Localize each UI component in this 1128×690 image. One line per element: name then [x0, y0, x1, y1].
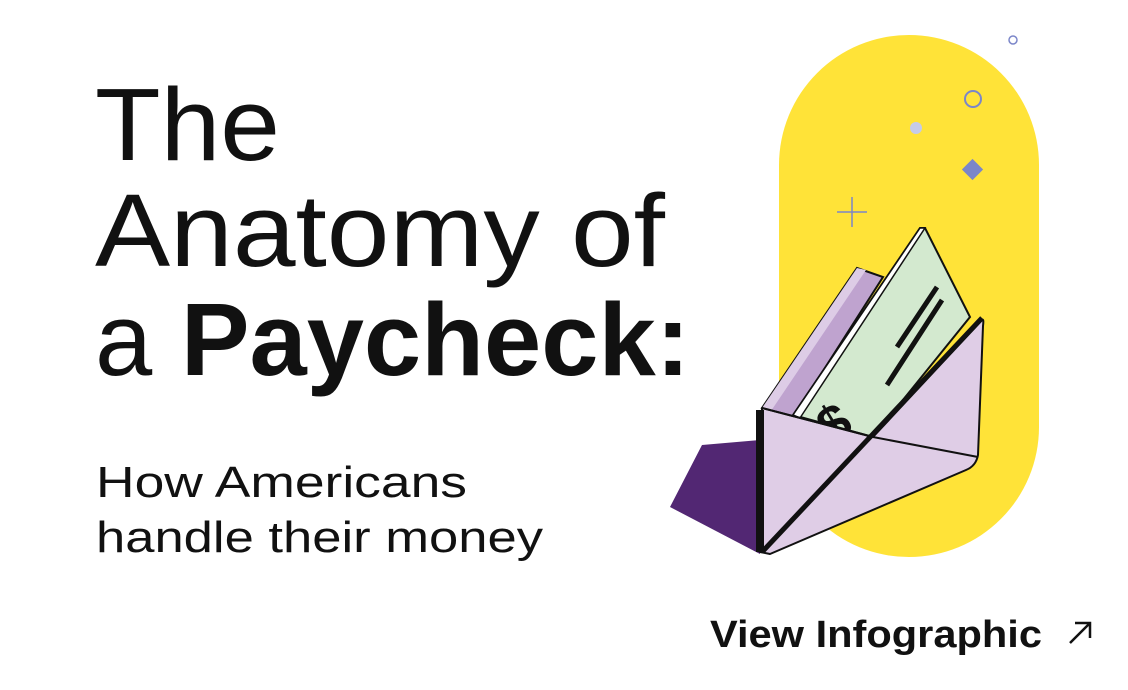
title: The: [95, 67, 280, 182]
title: a Paycheck:: [95, 282, 690, 397]
link: view infographic: View Infographic: [710, 614, 1042, 656]
title: Anatomy of: [95, 173, 665, 288]
envelope shadow: [670, 440, 760, 554]
paycheck: [793, 228, 970, 456]
paycheck: $: [807, 392, 862, 456]
title: [95, 67, 690, 397]
illustration: envelope with paycheck: [670, 35, 1039, 557]
front of envelope: [760, 318, 983, 554]
decorations: [837, 36, 1017, 227]
yellow pill background: [779, 35, 1039, 557]
back flap: [762, 268, 883, 418]
icon: arrow: [1070, 623, 1090, 643]
subtitle: How Americans: [96, 458, 467, 507]
subtitle: handle their money: [96, 513, 543, 562]
subtitle: [96, 458, 543, 562]
